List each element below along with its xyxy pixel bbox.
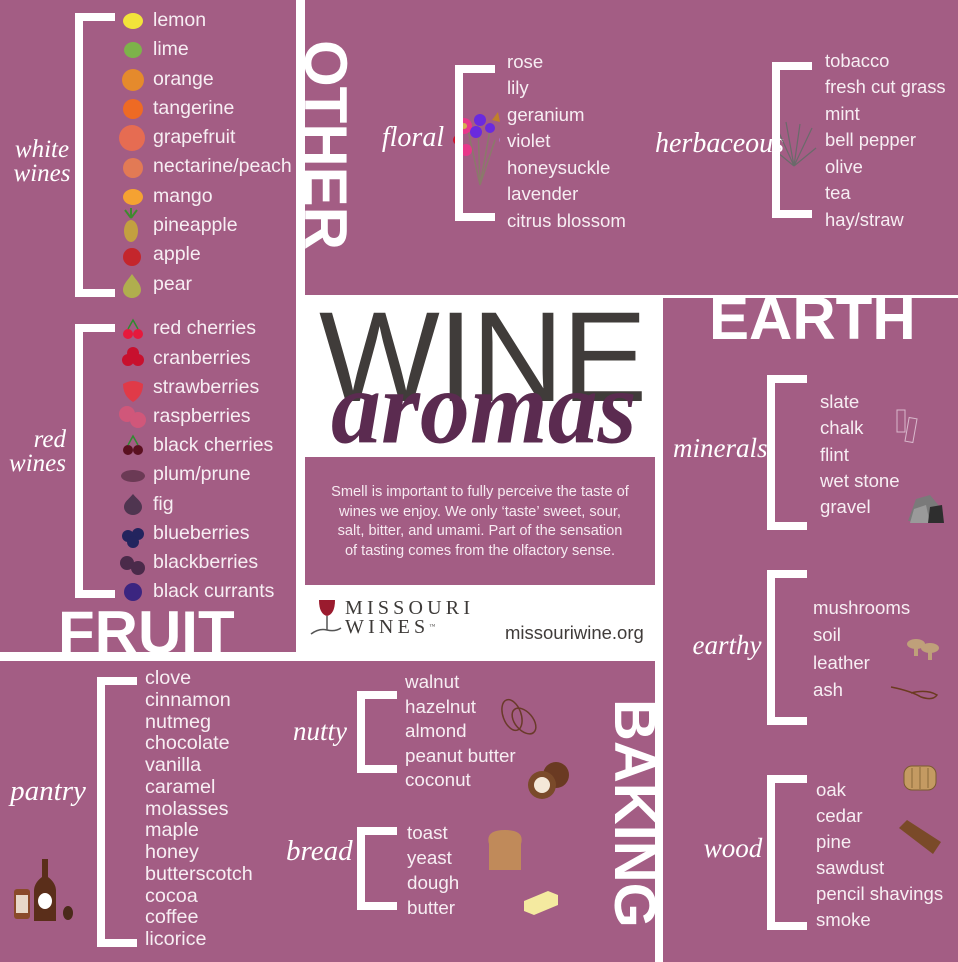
- icon: flowers: [453, 112, 500, 185]
- icon: butter: [524, 891, 558, 915]
- icons: red wine fruits: [119, 318, 146, 601]
- label: pantry: pantry: [10, 775, 86, 807]
- text box: description: [305, 457, 655, 585]
- list: pantry: honey: [145, 841, 199, 863]
- list: red wines: blackberries: [153, 551, 258, 573]
- label: white wines: white: [15, 136, 69, 163]
- list: pantry: nutmeg: [145, 710, 211, 732]
- icon: pantry bottles: [14, 859, 73, 921]
- list: wood: [816, 779, 943, 930]
- list: earthy: ash: [813, 679, 843, 700]
- list: red wines: fig: [153, 493, 174, 515]
- list: floral: citrus blossom: [507, 210, 626, 231]
- list: herbaceous: [825, 50, 946, 230]
- list: white wines: pineapple: [153, 214, 238, 236]
- list: minerals: chalk: [820, 417, 863, 438]
- list: wood: sawdust: [816, 857, 884, 878]
- list: minerals: flint: [820, 444, 849, 465]
- list: pantry: [145, 667, 253, 950]
- text box: description: salt, bitter, and umami. Part of the sensation: [338, 523, 622, 539]
- label: wood: wood: [704, 833, 762, 863]
- label: herbaceous: herbaceous: [655, 128, 784, 159]
- bracket: red wines: [75, 324, 115, 598]
- list: herbaceous: tea: [825, 182, 851, 203]
- bracket: nutty: [357, 691, 397, 773]
- list: earthy: [813, 597, 910, 700]
- list: red wines: cranberries: [153, 347, 251, 369]
- list: red wines: black cherries: [153, 434, 273, 456]
- list: floral: lily: [507, 77, 529, 98]
- list: earthy: leather: [813, 652, 870, 673]
- list: white wines: lime: [153, 38, 189, 60]
- icon: herbs: [772, 122, 816, 166]
- icon: barrel: [904, 766, 936, 790]
- list: red wines: black currants: [153, 580, 274, 602]
- list: pantry: licorice: [145, 928, 207, 950]
- list: white wines: tangerine: [153, 97, 234, 119]
- list: minerals: slate: [820, 391, 859, 412]
- list: white wines: nectarine/peach: [153, 155, 292, 177]
- list: pantry: clove: [145, 667, 191, 689]
- list: herbaceous: bell pepper: [825, 129, 916, 150]
- label: red wines: wines: [9, 450, 66, 477]
- list: bread: toast: [407, 822, 448, 843]
- list: pantry: coffee: [145, 906, 199, 928]
- list: red wines: [153, 317, 274, 602]
- panel: fruit: [0, 0, 296, 652]
- list: red wines: plum/prune: [153, 463, 251, 485]
- list: pantry: cocoa: [145, 884, 198, 906]
- bracket: pantry: [97, 677, 137, 947]
- list: red wines: strawberries: [153, 376, 259, 398]
- list: red wines: raspberries: [153, 405, 251, 427]
- title: aromas: aromas: [331, 349, 637, 466]
- list: pantry: maple: [145, 819, 199, 841]
- list: pantry: caramel: [145, 776, 215, 798]
- list: herbaceous: mint: [825, 103, 860, 124]
- list: floral: [507, 51, 626, 231]
- list: bread: butter: [407, 897, 455, 918]
- list: wood: pencil shavings: [816, 883, 943, 904]
- icon: leather: [890, 686, 938, 700]
- panel: earth: [663, 298, 958, 962]
- list: floral: violet: [507, 130, 550, 151]
- label: minerals: minerals: [673, 433, 768, 463]
- list: herbaceous: fresh cut grass: [825, 76, 946, 97]
- list: nutty: hazelnut: [405, 696, 476, 716]
- bracket: earthy: [767, 570, 807, 725]
- label: earthy: earthy: [692, 630, 761, 660]
- label: white wines: wines: [14, 160, 70, 187]
- list: wood: oak: [816, 779, 846, 800]
- list: white wines: mango: [153, 185, 213, 207]
- list: red wines: red cherries: [153, 317, 256, 339]
- bracket: herbaceous: [772, 62, 812, 218]
- list: floral: geranium: [507, 104, 585, 125]
- list: herbaceous: hay/straw: [825, 209, 904, 230]
- text box: description: of tasting comes from the olfactory sense.: [345, 542, 615, 558]
- label: red wines: red: [34, 426, 66, 453]
- title block: [305, 286, 655, 643]
- list: white wines: grapefruit: [153, 126, 235, 148]
- label: nutty: nutty: [293, 716, 347, 746]
- list: white wines: apple: [153, 243, 201, 265]
- icons: white wine fruits: [119, 13, 145, 298]
- label: bread: bread: [286, 835, 353, 867]
- list: white wines: [153, 9, 292, 295]
- panel: other: [305, 0, 958, 295]
- list: bread: [407, 822, 459, 918]
- label: red wines: [9, 426, 66, 477]
- list: pantry: vanilla: [145, 754, 201, 776]
- icon: stones: [908, 495, 944, 523]
- logo: Missouri Wines: WINES™: [345, 616, 439, 638]
- panel: baking: [0, 661, 655, 962]
- list: wood: pine: [816, 831, 851, 852]
- list: nutty: coconut: [405, 769, 471, 790]
- list: pantry: chocolate: [145, 732, 230, 754]
- icon: mushrooms: [907, 639, 939, 660]
- bracket: wood: [767, 775, 807, 930]
- list: earthy: soil: [813, 624, 841, 645]
- list: pantry: molasses: [145, 798, 229, 820]
- list: red wines: blueberries: [153, 522, 249, 544]
- icon: log: [899, 820, 941, 854]
- list: nutty: walnut: [405, 671, 459, 692]
- bracket: floral: [455, 65, 495, 221]
- list: white wines: lemon: [153, 9, 206, 31]
- text box: description: wines we enjoy. We only ‘taste’ sweet, sour,: [339, 504, 621, 520]
- label: white wines: [14, 136, 70, 187]
- url: missouriwine.org: [505, 622, 644, 643]
- list: herbaceous: tobacco: [825, 50, 889, 71]
- title: WINE: WINE: [319, 286, 645, 429]
- logo: Missouri Wines: MISSOURI: [345, 597, 474, 619]
- text box: description: Smell is important to fully perceive the taste of: [331, 484, 629, 500]
- list: nutty: peanut butter: [405, 744, 516, 766]
- bracket: bread: [357, 827, 397, 910]
- list: earthy: mushrooms: [813, 597, 910, 618]
- list: minerals: gravel: [820, 496, 871, 517]
- list: white wines: pear: [153, 273, 192, 295]
- list: pantry: butterscotch: [145, 863, 253, 885]
- bracket: minerals: [767, 375, 807, 530]
- list: floral: honeysuckle: [507, 157, 610, 178]
- list: white wines: orange: [153, 68, 214, 90]
- list: nutty: almond: [405, 720, 467, 741]
- list: minerals: wet stone: [820, 470, 900, 491]
- icon: almonds: [501, 698, 537, 735]
- list: bread: yeast: [407, 847, 452, 868]
- icon: toast: [488, 830, 522, 870]
- label: floral: floral: [382, 122, 444, 153]
- list: nutty: [405, 671, 516, 790]
- logo: Missouri Wines: [310, 597, 474, 638]
- list: floral: lavender: [507, 183, 578, 204]
- list: wood: smoke: [816, 909, 871, 930]
- list: herbaceous: olive: [825, 156, 863, 177]
- list: floral: rose: [507, 51, 543, 72]
- list: bread: dough: [407, 872, 459, 893]
- list: wood: cedar: [816, 805, 863, 826]
- list: minerals: [820, 391, 900, 517]
- icon: coconut: [528, 762, 569, 799]
- bracket: white wines: [75, 13, 115, 297]
- list: pantry: cinnamon: [145, 689, 231, 711]
- icon: chalk: [896, 410, 918, 444]
